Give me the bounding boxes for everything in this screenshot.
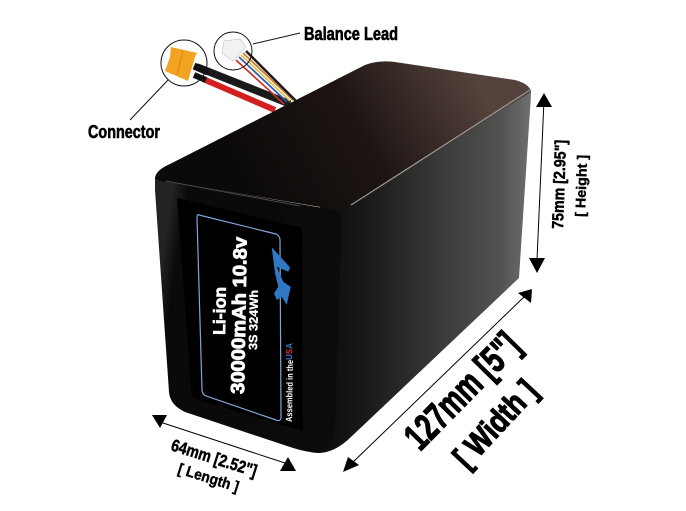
balance text: Balance Lead xyxy=(304,24,398,44)
label black panel xyxy=(177,198,303,431)
balance circle xyxy=(214,32,252,70)
label blue border xyxy=(197,215,281,421)
length sublabel: [ Length ] xyxy=(176,461,241,496)
balance leader line xyxy=(253,33,300,44)
front face xyxy=(155,177,342,453)
height arrow xyxy=(537,100,544,260)
top face xyxy=(155,61,531,209)
top edge highlights xyxy=(351,90,530,205)
length dimension xyxy=(152,415,296,496)
connector callout xyxy=(88,40,207,142)
icon: balance plug xyxy=(222,39,246,61)
width sublabel: [ Width ] xyxy=(446,373,544,475)
label text: USA flag: USA xyxy=(284,342,294,360)
connector text: Connector xyxy=(88,122,160,142)
icon: XT connector xyxy=(165,47,197,81)
wires: power leads xyxy=(194,66,290,110)
label text: assembled: Assembled in the xyxy=(284,360,295,422)
label text: cell and energy: 3S 324Wh xyxy=(246,290,261,350)
connector leader line xyxy=(130,80,168,120)
battery body xyxy=(155,61,531,453)
battery label xyxy=(177,198,303,431)
width text: 127mm [5"] xyxy=(396,325,529,458)
height sublabel: [ Height ] xyxy=(572,155,590,217)
balance lead callout xyxy=(214,24,398,70)
right side face xyxy=(300,90,531,453)
label logo xyxy=(272,247,291,305)
label text: Li-ion: Li-ion xyxy=(210,287,230,335)
height text: 75mm [2.95"] xyxy=(550,140,570,229)
wires: balance lead xyxy=(236,51,296,104)
length text: 64mm [2.52"] xyxy=(169,436,259,481)
height dimension xyxy=(529,93,590,273)
length arrow xyxy=(160,422,288,464)
width arrow xyxy=(350,296,525,465)
label text: capacity and voltage: 30000mAh 10.8v xyxy=(228,236,252,394)
connector circle xyxy=(161,40,207,86)
width dimension xyxy=(343,289,544,475)
